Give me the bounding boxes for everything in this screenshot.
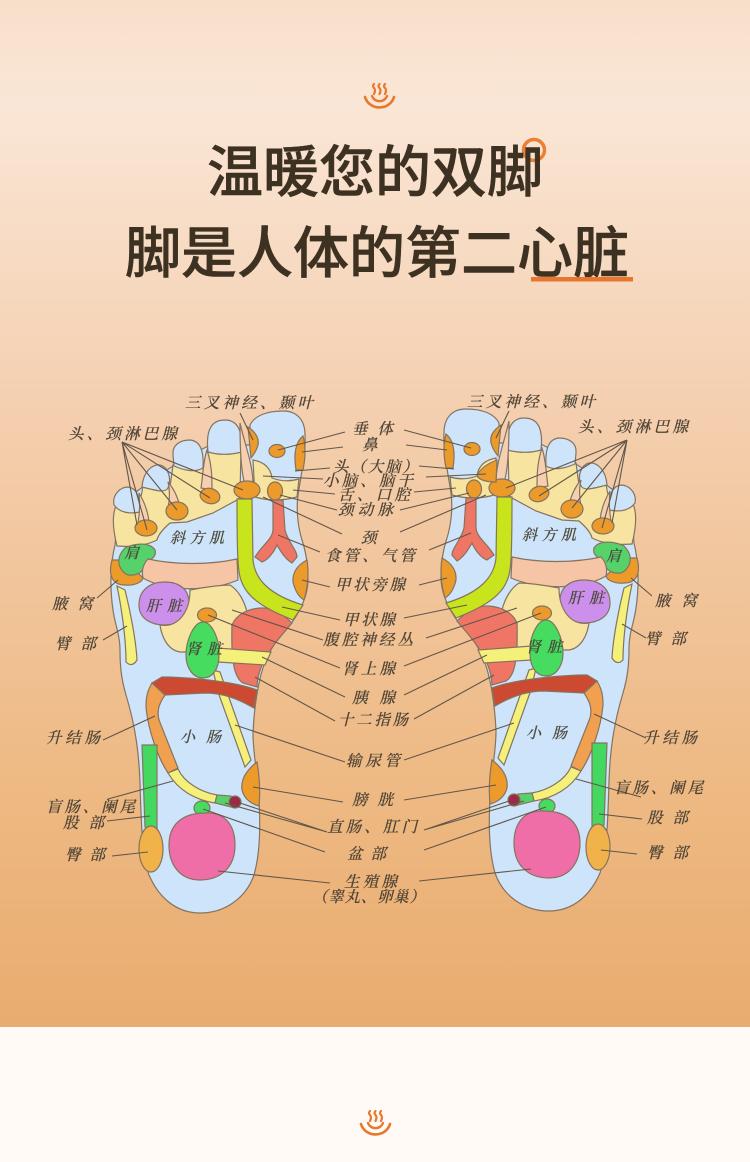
sole outline [111, 411, 308, 913]
right side labels: 股 部 [647, 809, 690, 827]
solar plexus [457, 606, 517, 685]
right side labels [467, 393, 705, 862]
pelvis [539, 799, 555, 813]
forefoot pad [113, 448, 241, 546]
solar plexus [232, 608, 292, 687]
big toe joint pad [450, 458, 496, 498]
right side labels: 三叉神经、颞叶 [467, 393, 597, 411]
centre organ labels: 头（大脑） [333, 458, 418, 476]
esophagus [255, 500, 297, 563]
adrenal [532, 606, 552, 620]
thigh strip [592, 743, 607, 830]
reflex spots orange [111, 427, 308, 600]
adrenal [198, 608, 216, 622]
transverse colon [152, 677, 257, 708]
centre organ labels: 颈 [361, 530, 380, 547]
centre organ labels: 输尿管 [346, 752, 402, 770]
pancreas bar [217, 648, 271, 665]
left side labels: 臂 部 [55, 635, 98, 653]
toe gaps [240, 423, 253, 486]
arm strip [117, 586, 137, 665]
right side labels: 肩 [606, 548, 623, 565]
rectum [215, 795, 231, 807]
centre organ labels: 十二指肠 [338, 711, 409, 729]
left side labels: 升结肠 [46, 729, 101, 747]
right side labels: 小 肠 [526, 725, 569, 742]
toes [207, 420, 242, 454]
reproductive gland [169, 813, 235, 880]
buttock [586, 824, 610, 870]
left side labels: 肾脏 [186, 641, 224, 658]
liver [139, 582, 189, 625]
cecum [532, 767, 581, 801]
thyroid band [237, 499, 303, 620]
right side labels: 臀 部 [647, 844, 690, 862]
toe gaps [496, 421, 509, 484]
kidney [186, 622, 219, 678]
left side labels: 股 部 [63, 814, 106, 832]
left side labels: 臀 部 [65, 846, 107, 864]
transverse colon [492, 675, 597, 706]
toes [507, 418, 542, 452]
left foot reflexology map [97, 411, 345, 913]
title line 1: 温暖您的双脚 [207, 128, 543, 209]
forefoot pad [508, 446, 636, 544]
trapezius band [142, 559, 238, 589]
centre organ labels: 胰 腺 [352, 689, 397, 707]
left side labels: 三叉神经、颞叶 [185, 394, 315, 412]
ureter [213, 670, 251, 767]
right side labels: 肾脏 [526, 639, 564, 656]
centre organ labels: 甲状腺 [343, 611, 397, 629]
right side labels: 升结肠 [643, 729, 698, 747]
ascending colon [571, 681, 603, 771]
left side labels: 肝脏 [146, 598, 184, 615]
ureter [498, 668, 536, 765]
thyroid band [446, 497, 512, 618]
thigh strip [142, 745, 157, 832]
right side labels: 盲肠、阑尾 [614, 779, 705, 797]
centre organ labels: 肾上腺 [342, 660, 397, 678]
sole outline [441, 409, 638, 911]
anus [229, 796, 241, 808]
mid-foot pad [502, 583, 589, 650]
centre organ labels: 甲状旁腺 [335, 576, 407, 594]
icon: steaming bowl bottom [361, 1111, 390, 1134]
right side labels: 斜方肌 [522, 527, 577, 544]
centre organ labels: 垂 体 [352, 420, 395, 438]
title [125, 128, 633, 290]
pelvis [194, 801, 210, 815]
reflex spots orange [441, 425, 638, 598]
shoulder [594, 542, 630, 573]
centre organ labels: 盆 部 [347, 845, 388, 863]
centre organ labels: 腹腔神经丛 [323, 631, 413, 649]
rectum [518, 793, 534, 805]
anus [508, 794, 520, 806]
shoulder [119, 544, 155, 575]
right leader lines [400, 411, 652, 881]
kidney [530, 620, 563, 676]
centre organ labels: 小脑、脑干 [323, 473, 414, 490]
centre organ labels: 颈动脉 [338, 501, 395, 519]
reproductive gland [514, 811, 580, 878]
accent circle [524, 140, 544, 160]
right side labels: 肝脏 [568, 590, 606, 607]
left side labels: 腋 窝 [52, 595, 95, 613]
left side labels [46, 394, 315, 864]
cecum [168, 769, 217, 803]
buttock [139, 826, 163, 872]
liver [560, 580, 610, 623]
bladder [242, 762, 260, 806]
centre organ labels: 鼻 [362, 436, 378, 454]
esophagus [452, 498, 494, 561]
pancreas bar [478, 646, 532, 663]
centre organ labels [312, 420, 425, 906]
centre organ labels: 食管、气管 [325, 547, 417, 565]
trapezius band [511, 557, 607, 587]
title line 2: 脚是人体的第二心脏 [125, 209, 629, 290]
centre organ labels: 膀 胱 [352, 791, 395, 809]
centre organ labels: 生殖腺 [344, 873, 399, 891]
arm strip [612, 584, 632, 663]
left side labels: 斜方肌 [170, 530, 225, 547]
ascending colon [146, 683, 178, 773]
right side labels: 腋 窝 [655, 592, 699, 610]
icon: steaming bowl top [365, 84, 394, 107]
right foot reflexology map [400, 409, 652, 911]
bladder [489, 760, 507, 804]
big toe joint pad [253, 460, 299, 500]
left side labels: 小 肠 [180, 729, 223, 746]
centre organ labels: （睾丸、卵巢） [312, 888, 425, 906]
centre organ labels: 直肠、肛门 [327, 818, 419, 836]
right side labels: 头、颈淋巴腺 [578, 418, 690, 436]
left side labels: 头、颈淋巴腺 [68, 425, 179, 443]
title underline [531, 277, 633, 282]
bottom section background [0, 1027, 750, 1162]
mid-foot pad [160, 585, 247, 652]
left side labels: 盲肠、阑尾 [46, 798, 137, 816]
right side labels: 臂 部 [645, 630, 688, 648]
left leader lines [97, 413, 345, 883]
centre organ labels: 舌、口腔 [338, 486, 412, 504]
left side labels: 肩 [124, 545, 141, 562]
